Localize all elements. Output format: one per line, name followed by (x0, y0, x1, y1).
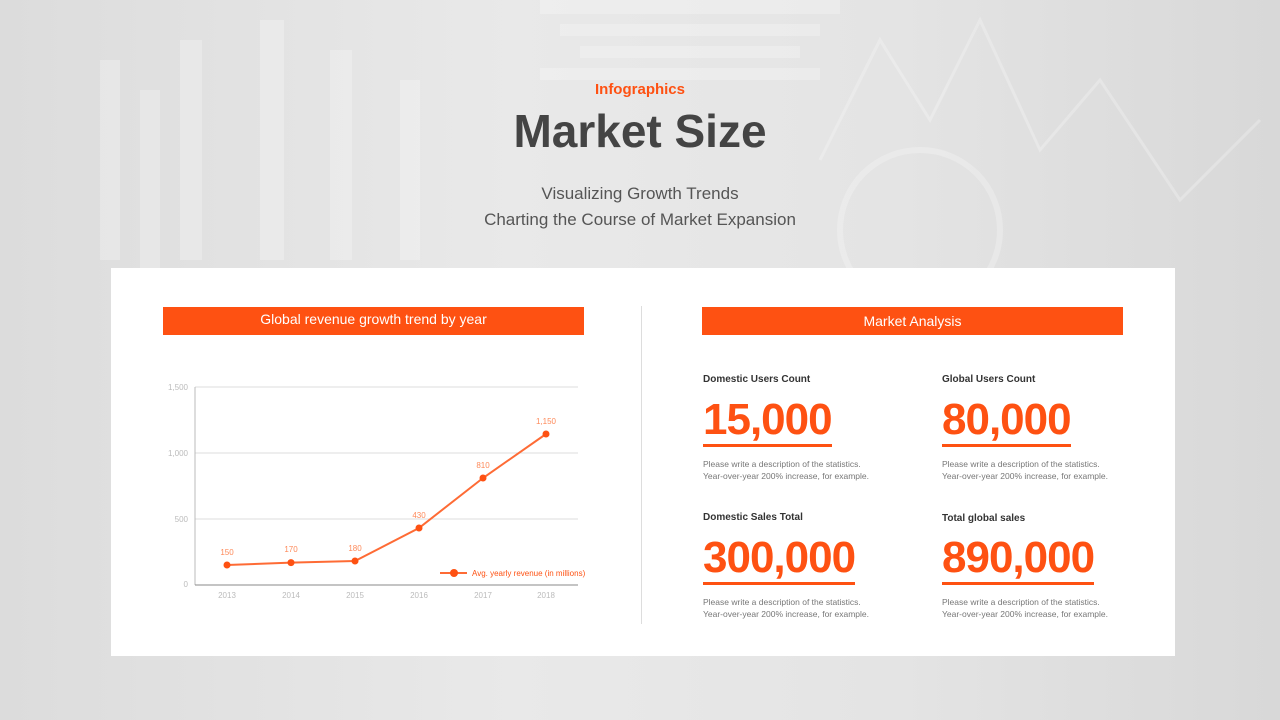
line chart: 430 (412, 511, 426, 520)
line chart: 2013 (218, 591, 236, 600)
line chart: 810 (476, 461, 490, 470)
stat: domestic sales: 300,000 (703, 533, 855, 582)
stat: domestic sales: Domestic Sales Total (703, 512, 803, 523)
title: Market Size (513, 105, 767, 157)
stat: global sales: 890,000 (942, 533, 1094, 582)
stat: domestic sales: Please write a description of the statistics. (703, 597, 861, 607)
tagline: Charting the Course of Market Expansion (484, 210, 796, 229)
line chart: 1,150 (536, 417, 557, 426)
stat: global sales: Please write a description of the statistics. (942, 597, 1100, 607)
stat: global users: Year-over-year 200% increase, for example. (942, 471, 1108, 481)
line chart: 170 (284, 545, 298, 554)
divider (641, 306, 642, 624)
tagline: Visualizing Growth Trends (541, 184, 739, 203)
line chart: Avg. yearly revenue (in millions) (472, 569, 586, 578)
stat: domestic users: Domestic Users Count (703, 374, 810, 385)
stat: global sales: Total global sales (942, 513, 1025, 524)
stat: global sales: Year-over-year 200% increase, for example. (942, 609, 1108, 619)
line chart: 0 (184, 580, 189, 589)
stat: domestic users (703, 374, 869, 481)
line chart: 150 (220, 548, 234, 557)
analysis header (702, 307, 1123, 335)
line chart: 2014 (282, 591, 300, 600)
line chart: 2015 (346, 591, 364, 600)
subtitle: Infographics: Infographics (595, 81, 685, 98)
line chart: 1,500 (168, 383, 189, 392)
card panel (111, 268, 1175, 656)
line chart: 500 (175, 515, 189, 524)
line chart: 2018 (537, 591, 555, 600)
stat: global sales (942, 513, 1108, 619)
chart header (163, 307, 584, 335)
line chart: 2016 (410, 591, 428, 600)
chart header: Global revenue growth trend by year (260, 311, 487, 327)
stat: domestic users: 15,000 (703, 395, 832, 444)
stat: domestic sales: Year-over-year 200% increase, for example. (703, 609, 869, 619)
stat: global users: 80,000 (942, 395, 1071, 444)
stat: global users: Global Users Count (942, 374, 1035, 385)
analysis header: Market Analysis (863, 313, 962, 329)
line chart: 1,000 (168, 449, 189, 458)
tagline (484, 184, 796, 229)
line chart (168, 383, 586, 600)
stat: global users: Please write a description of the statistics. (942, 459, 1100, 469)
stat: domestic users: Year-over-year 200% increase, for example. (703, 471, 869, 481)
line chart: 2017 (474, 591, 492, 600)
stat: domestic sales (703, 512, 869, 619)
stat: global users (942, 374, 1108, 481)
stat: domestic users: Please write a description of the statistics. (703, 459, 861, 469)
line chart: 180 (348, 544, 362, 553)
